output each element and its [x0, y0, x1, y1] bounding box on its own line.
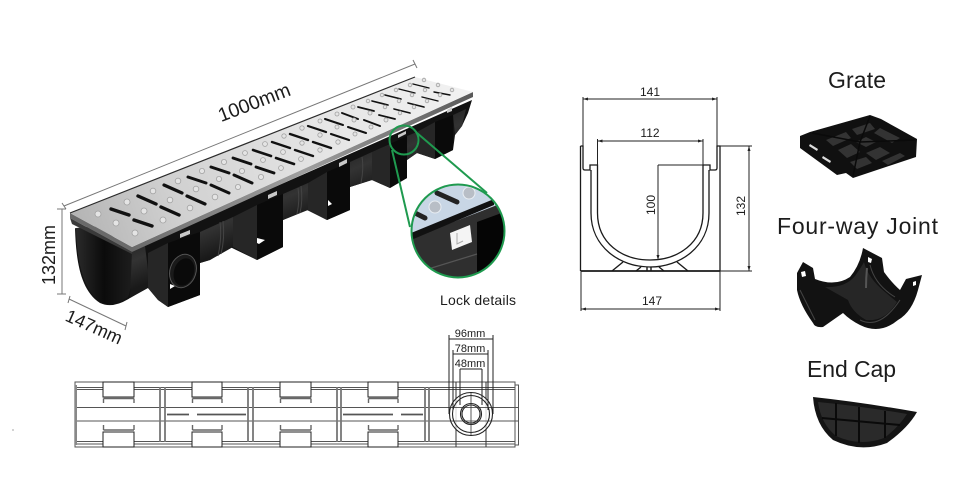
grate end shadow [70, 218, 132, 254]
web openings [826, 123, 905, 169]
outlet dimension lines [449, 335, 493, 414]
dimension lines [581, 97, 752, 311]
grate holes [95, 78, 454, 236]
side outlet pipe [165, 251, 201, 291]
heading: grate: Grate [828, 67, 886, 93]
profile walls [580, 146, 720, 271]
label: 96mm: 96mm [455, 328, 485, 340]
part: end cap [813, 397, 917, 447]
product: drainage channel with steel grate [70, 77, 473, 307]
plan view drawing [75, 328, 518, 447]
magnified detail content [412, 186, 504, 276]
width dimension line [68, 296, 127, 330]
rim highlights [800, 265, 900, 322]
tab windows [801, 257, 916, 286]
label: 78mm: 78mm [455, 343, 485, 355]
top and bottom blocks [103, 382, 398, 447]
label: 48mm: 48mm [455, 358, 485, 370]
grate front edge [70, 92, 473, 252]
outlet centre lines [450, 393, 492, 435]
label: 132: 132 [734, 196, 748, 216]
grate rear edge [70, 77, 415, 213]
label: 1000mm: 1000mm [215, 79, 294, 127]
rib side faces [148, 122, 435, 307]
cross-section drawing [580, 85, 752, 311]
base and feet [581, 262, 720, 271]
length dimension line [62, 60, 417, 209]
green lens outlines and leader lines [390, 126, 504, 278]
tube highlights [218, 157, 363, 256]
channel body silhouette [75, 100, 472, 307]
rib faces [168, 115, 453, 307]
centre slots [167, 414, 423, 416]
label: 141: 141 [640, 85, 660, 99]
outlet block [456, 382, 486, 447]
label: 147: 147 [642, 294, 662, 308]
left end wall [75, 385, 77, 445]
part: grate [800, 115, 917, 178]
web spokes [812, 116, 915, 176]
side clips [809, 144, 831, 163]
label: 112: 112 [640, 126, 660, 140]
inner panel [818, 402, 907, 442]
part: four-way joint [797, 248, 922, 329]
label: 100: 100 [644, 195, 658, 215]
label: 147mm: 147mm [63, 306, 125, 348]
channel open end [76, 226, 132, 304]
label: 132mm: 132mm [39, 225, 59, 285]
callout: lock detail magnifier [390, 126, 510, 280]
block bars [104, 398, 398, 430]
label: lock details: Lock details [440, 292, 516, 308]
arrowheads [581, 98, 750, 310]
grate slots: front row [134, 92, 450, 226]
cross ribs [160, 387, 429, 442]
grate slots: rear row [111, 84, 429, 215]
channel floor [825, 262, 897, 320]
tube sections between ribs [130, 109, 466, 298]
heading: four-way joint: Four-way Joint [777, 213, 939, 239]
cap ribs [822, 403, 900, 443]
heading: end cap: End Cap [807, 356, 896, 382]
outer outline and long lines [75, 382, 518, 447]
height dimension line [57, 209, 66, 294]
grate top [70, 77, 473, 247]
speck [12, 429, 14, 431]
rib windows [170, 200, 332, 289]
lock tabs [180, 107, 452, 238]
outlet circles [450, 392, 492, 436]
